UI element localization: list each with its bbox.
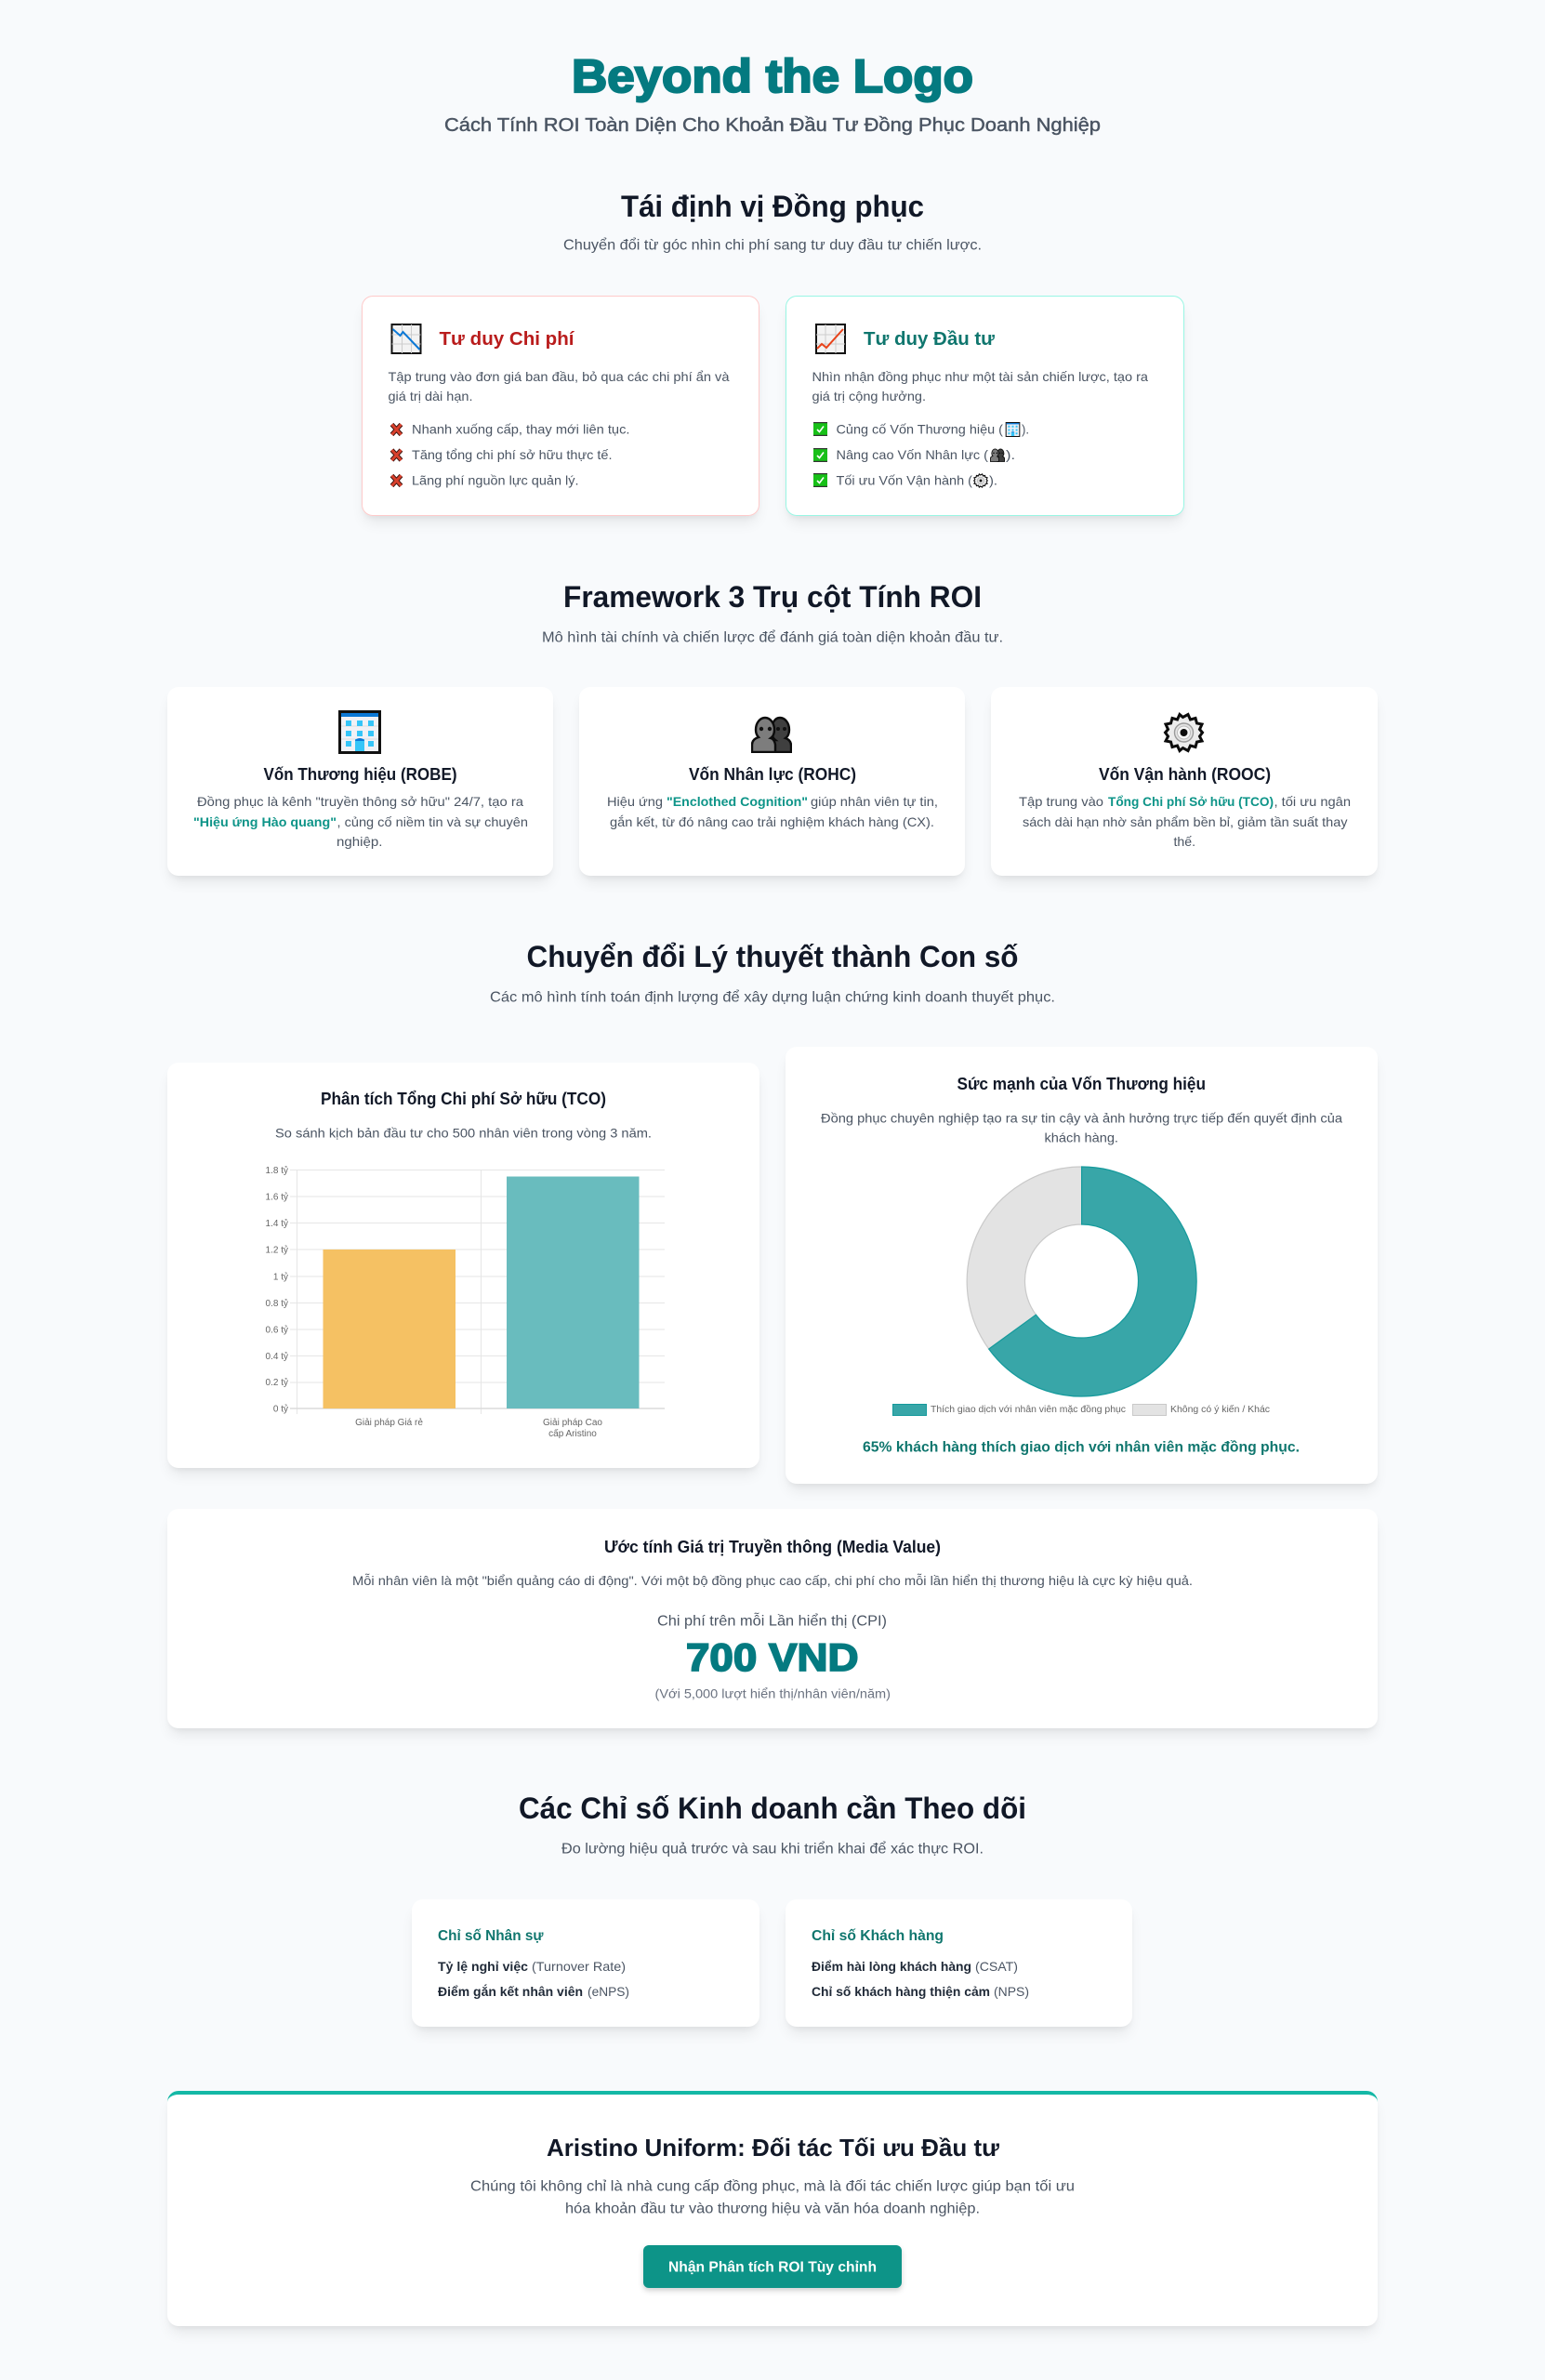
heading: Sức mạnh của Vốn Thương hiệu: [957, 1075, 1206, 1093]
panel: brand capital power: [786, 1047, 1378, 1484]
legend: [892, 1404, 1270, 1415]
slice: 65%: [989, 1167, 1196, 1396]
y-axis labels: 1.4 tỷ: [266, 1218, 288, 1229]
description: Tập trung vào: [1019, 794, 1103, 809]
heading: reposition: Tái định vị Đồng phục: [621, 190, 924, 223]
heading: framework: Framework 3 Trụ cột Tính ROI: [563, 580, 982, 614]
y-axis labels: 1.6 tỷ: [266, 1192, 288, 1203]
description: nghiệp.: [337, 834, 383, 849]
description: Hiệu ứng: [607, 794, 663, 809]
metric: (CSAT): [975, 1959, 1018, 1974]
description: [821, 1110, 1342, 1145]
y-axis labels: 1.2 tỷ: [266, 1244, 288, 1255]
description: "Enclothed Cognition": [667, 794, 808, 809]
description: giúp nhân viên tự tin,: [811, 794, 938, 809]
panel: investment mindset: [786, 296, 1184, 516]
description: So sánh kịch bản đầu tư cho 500 nhân viên trong vòng 3 năm.: [275, 1125, 652, 1140]
button: Nhận Phân tích ROI Tùy chỉnh: [668, 2259, 877, 2276]
description: [812, 369, 1148, 403]
list item: ).: [1022, 422, 1029, 437]
y-axis labels: 0 tỷ: [273, 1404, 288, 1415]
metric: (eNPS): [588, 1984, 629, 1999]
heading: Chỉ số Khách hàng: [812, 1928, 944, 1944]
heading: Ước tính Giá trị Truyền thông (Media Value): [604, 1538, 941, 1556]
panel: HR metrics: [412, 1899, 759, 2027]
description: khách hàng.: [1045, 1130, 1118, 1145]
stat note: (Với 5,000 lượt hiển thị/nhân viên/năm): [654, 1686, 891, 1701]
description: Đồng phục chuyên nghiệp tạo ra sự tin cậy và ảnh hưởng trực tiếp đến quyết định của: [821, 1110, 1342, 1125]
description: Tập trung vào đơn giá ban đầu, bỏ qua các chi phí ẩn và: [388, 369, 729, 384]
y-axis labels: 1.8 tỷ: [266, 1165, 288, 1176]
description: Đồng phục là kênh "truyền thông sở hữu" 24/7, tạo ra: [197, 794, 523, 809]
metric: [438, 1959, 626, 1974]
heading: Aristino Uniform: Đối tác Tối ưu Đầu tư: [547, 2134, 999, 2162]
y-axis labels: 0.8 tỷ: [266, 1298, 288, 1309]
text: framework intro: Mô hình tài chính và chiến lược để đánh giá toàn diện khoản đầu tư.: [542, 628, 1003, 645]
description: thế.: [1173, 834, 1195, 849]
heading: Vốn Vận hành (ROOC): [1099, 765, 1271, 784]
heading: Chỉ số Nhân sự: [438, 1928, 544, 1944]
heading: numbers: Chuyển đổi Lý thuyết thành Con số: [526, 940, 1019, 973]
description: , tối ưu ngân: [1274, 794, 1351, 809]
list item: Củng cố Vốn Thương hiệu (: [837, 422, 1003, 437]
y-axis labels: 0.4 tỷ: [266, 1351, 288, 1362]
icon: gear: [1166, 714, 1203, 751]
metric: (Turnover Rate): [532, 1959, 626, 1974]
panel: call to action: [167, 2091, 1378, 2326]
y-axis labels: [266, 1165, 288, 1415]
description: [470, 2179, 1075, 2216]
list item: Lãng phí nguồn lực quản lý.: [411, 472, 578, 487]
list item: Nhanh xuống cấp, thay mới liên tục.: [411, 422, 629, 437]
panel: cost mindset: [361, 296, 759, 516]
list item: ).: [989, 472, 997, 487]
panel: customer metrics: [786, 1899, 1132, 2027]
bar chart: [266, 1165, 665, 1439]
stat value: 700 VND: [686, 1635, 859, 1679]
title: Beyond the Logo: [572, 50, 973, 102]
donut chart: [967, 1167, 1196, 1396]
description: Mỗi nhân viên là một "biển quảng cáo di động". Với một bộ đồng phục cao cấp, chi phí cho mỗi lần hiển thị thương hiệu là cực kỳ hiệu quả.: [352, 1573, 1193, 1588]
icon: people: [752, 718, 791, 752]
heading: metrics: Các Chỉ số Kinh doanh cần Theo dõi: [519, 1792, 1026, 1825]
metric: Điểm hài lòng khách hàng: [812, 1959, 971, 1974]
bar: premium: [507, 1177, 640, 1408]
panel: brand capital: [167, 687, 553, 876]
callout: 65% khách hàng thích giao dịch với nhân viên mặc đồng phục.: [863, 1439, 1300, 1456]
icon: falling chart: [391, 324, 420, 353]
legend: Thích giao dịch với nhân viên mặc đồng phục: [931, 1404, 1126, 1415]
text: numbers intro: Các mô hình tính toán định lượng để xây dựng luận chứng kinh doanh thuyết phục.: [490, 989, 1055, 1006]
text: reposition intro: Chuyển đổi từ góc nhìn chi phí sang tư duy đầu tư chiến lược.: [563, 236, 982, 253]
slice: others: [967, 1167, 1082, 1349]
stat label: Chi phí trên mỗi Lần hiển thị (CPI): [657, 1612, 887, 1629]
list item: Tăng tổng chi phí sở hữu thực tế.: [411, 447, 612, 462]
y-axis labels: 0.2 tỷ: [266, 1377, 288, 1388]
x-axis labels: cấp Aristino: [548, 1428, 597, 1439]
description: [607, 794, 938, 829]
x-axis labels: Giải pháp Giá rẻ: [355, 1418, 423, 1428]
metric: Tỷ lệ nghỉ việc: [438, 1959, 528, 1974]
bar: low-cost: [324, 1250, 456, 1408]
description: "Hiệu ứng Hào quang": [193, 814, 337, 829]
panel: operations capital: [991, 687, 1378, 876]
description: Tổng Chi phí Sở hữu (TCO): [1108, 794, 1274, 809]
description: Chúng tôi không chỉ là nhà cung cấp đồng phục, mà là đối tác chiến lược giúp bạn tối ưu: [470, 2179, 1075, 2194]
description: gắn kết, từ đó nâng cao trải nghiệm khách hàng (CX).: [610, 814, 934, 829]
description: giá trị cộng hưởng.: [812, 389, 926, 403]
icon: building: [340, 712, 379, 753]
text: metrics intro: Đo lường hiệu quả trước và sau khi triển khai để xác thực ROI.: [561, 1841, 984, 1858]
y-axis labels: 1 tỷ: [273, 1272, 288, 1283]
list item: Tối ưu Vốn Vận hành (: [837, 472, 972, 487]
panel: TCO analysis: [167, 1063, 759, 1468]
heading: Phân tích Tổng Chi phí Sở hữu (TCO): [321, 1090, 606, 1108]
list item: ).: [1006, 447, 1015, 462]
heading: Vốn Thương hiệu (ROBE): [264, 765, 457, 784]
button: [643, 2245, 902, 2288]
y-axis labels: 0.6 tỷ: [266, 1324, 288, 1335]
list item: Nâng cao Vốn Nhân lực (: [837, 447, 988, 462]
metric: (NPS): [994, 1984, 1029, 1999]
panel: media value: [167, 1509, 1378, 1728]
heading: Tư duy Chi phí: [439, 329, 574, 350]
description: sách dài hạn nhờ sản phẩm bền bỉ, giảm tần suất thay: [1023, 814, 1348, 829]
heading: Tư duy Đầu tư: [864, 329, 996, 350]
description: hóa khoản đầu tư vào thương hiệu và văn hóa doanh nghiệp.: [565, 2202, 980, 2216]
description: giá trị dài hạn.: [388, 389, 472, 403]
heading: Vốn Nhân lực (ROHC): [689, 765, 856, 784]
x-axis labels: Giải pháp Cao: [543, 1418, 602, 1428]
legend: Không có ý kiến / Khác: [1170, 1404, 1270, 1415]
description: [1019, 794, 1351, 849]
icon: rising chart: [816, 324, 845, 353]
metric: Điểm gắn kết nhân viên: [438, 1983, 583, 1999]
description: [388, 369, 729, 403]
description: [193, 794, 528, 849]
panel: human capital: [579, 687, 965, 876]
x-axis labels: [355, 1418, 602, 1439]
subtitle: Cách Tính ROI Toàn Diện Cho Khoản Đầu Tư Đồng Phục Doanh Nghiệp: [444, 115, 1101, 136]
description: Nhìn nhận đồng phục như một tài sản chiến lược, tạo ra: [812, 369, 1148, 384]
metric: Chỉ số khách hàng thiện cảm: [812, 1984, 990, 1999]
description: , củng cố niềm tin và sự chuyên: [337, 814, 528, 829]
